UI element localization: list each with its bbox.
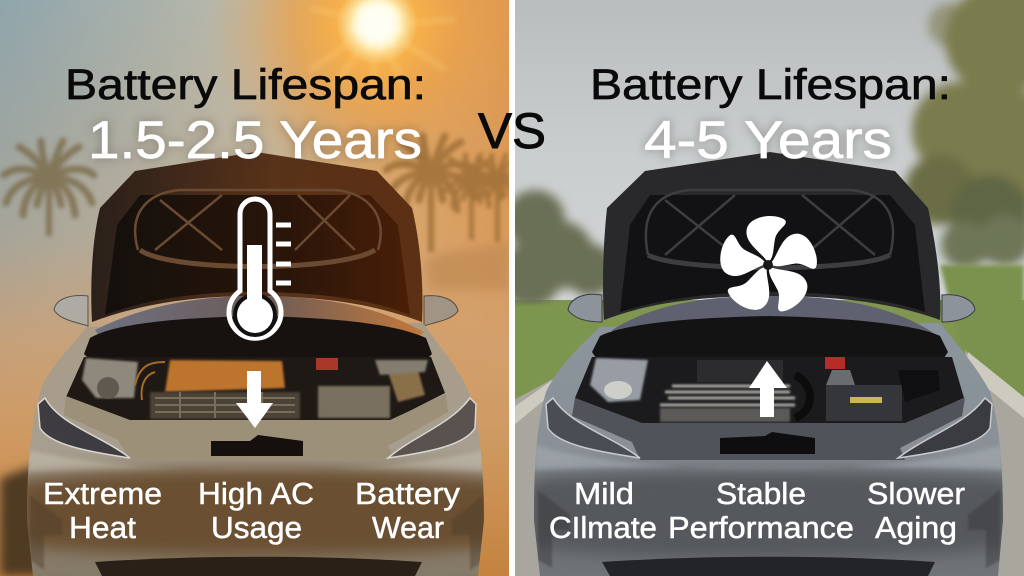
left mirror (54, 296, 88, 326)
label: Mild Climate: Mild (574, 476, 634, 511)
background: desert sky and sand (0, 0, 510, 576)
open hood (91, 152, 423, 322)
label: Slower Aging: Slower (867, 476, 965, 511)
label: Mild Climate: CIlmate (549, 510, 657, 545)
lower grille (95, 557, 422, 576)
bumper shade for labels (20, 468, 500, 556)
front slot (211, 435, 303, 456)
bonnet highlight (28, 450, 484, 472)
right mirror (942, 295, 975, 322)
bumper shade for labels (530, 471, 1010, 558)
label: Stable Performance (668, 476, 854, 545)
car: hot panel (20, 152, 500, 576)
heading: left lifespan: 1.5-2.5 Years (88, 111, 422, 170)
icon: up arrow (749, 361, 787, 417)
icon: fan (715, 216, 820, 317)
label: Mild Climate (549, 476, 657, 545)
label: Battery Wear: Wear (372, 510, 444, 545)
car body (530, 320, 1010, 576)
label: High AC Usage: Usage (211, 510, 302, 545)
heading: left lifespan (65, 61, 426, 170)
label: High AC Usage (198, 476, 314, 545)
hood inner panel (105, 195, 410, 315)
wiper and cowl band (84, 316, 432, 358)
fog light recesses (538, 490, 570, 568)
front bonnet lip (572, 398, 965, 460)
label: Battery Wear: Battery (355, 476, 461, 511)
left mirror (568, 294, 602, 322)
heading: right lifespan (590, 61, 951, 170)
right mirror (424, 296, 458, 326)
label: Stable Performance: Stable (716, 476, 806, 511)
car body (20, 320, 500, 576)
label: Extreme Heat: Heat (69, 510, 136, 545)
panel: mild climate (right) (498, 0, 1024, 576)
VS label: VS (478, 103, 546, 159)
bonnet highlight (534, 445, 1003, 470)
background: sky, trees, grass and road (498, 0, 1024, 576)
left headlight (546, 398, 640, 458)
heading: right lifespan: 4-5 Years (644, 111, 892, 170)
front bonnet lip (64, 394, 448, 460)
hood inner panel (620, 195, 925, 312)
icon: hazy palm tree, left (4, 141, 94, 236)
label: Extreme Heat (43, 476, 162, 545)
label: Stable Performance: Performance (668, 510, 854, 545)
icon: thermometer (229, 199, 291, 338)
label: Extreme Heat: Extreme (43, 476, 162, 511)
right headlight (898, 398, 992, 458)
windshield (95, 296, 424, 336)
icon: down arrow (236, 371, 273, 428)
label: High AC Usage: High AC (198, 476, 314, 511)
fog light recesses (30, 495, 62, 570)
divider (509, 0, 515, 576)
car: mild panel (530, 152, 1010, 576)
hood liner ribs (135, 190, 381, 266)
heading: right lifespan: Battery Lifespan: (590, 61, 951, 109)
label: Slower Aging (867, 476, 965, 545)
left headlight (38, 398, 130, 458)
panel: hot climate (left) (0, 0, 526, 576)
engine bay (66, 357, 445, 421)
label: Battery Wear (355, 476, 461, 545)
engine bay (575, 357, 964, 424)
windshield (612, 296, 932, 332)
right headlight (388, 398, 476, 458)
heading: left lifespan: Battery Lifespan: (65, 61, 426, 109)
icon: palm trees, right (386, 136, 526, 252)
wiper and cowl band (592, 316, 948, 358)
front slot (720, 432, 815, 454)
open hood (603, 152, 940, 320)
label: Slower Aging: Aging (875, 510, 957, 545)
hood liner ribs (646, 190, 893, 268)
lower grille (602, 557, 935, 576)
